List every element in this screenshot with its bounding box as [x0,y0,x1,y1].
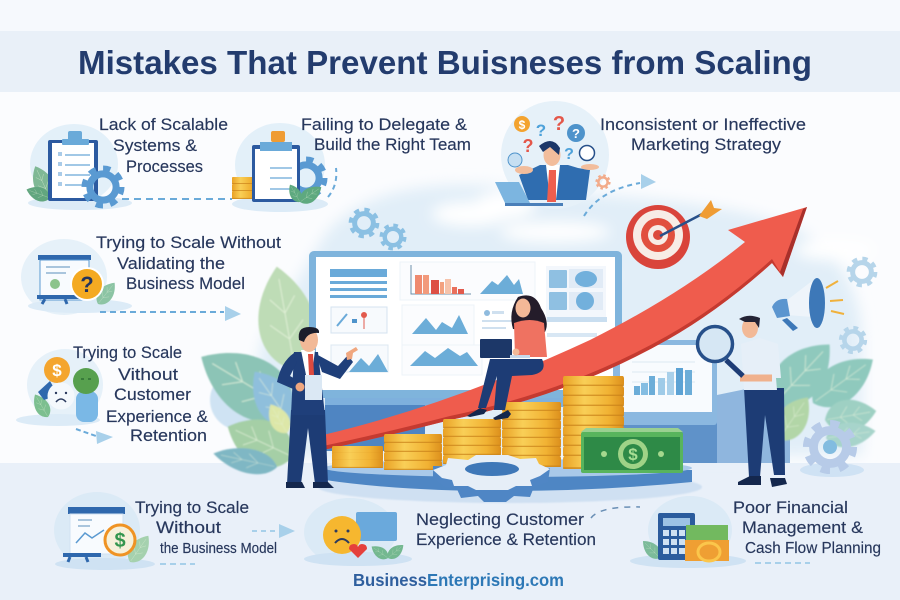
label: Systems & [113,136,198,155]
title banner: Mistakes That Prevent Buisneses from Scaling [78,44,812,81]
icon: customer feedback faces [16,349,103,426]
stack four [502,402,561,467]
area chart bottom [402,345,482,375]
stack two [384,434,442,470]
jacket [291,352,325,415]
background gears [351,210,405,249]
raised hand [346,347,358,360]
item: neglecting customer experience [304,498,596,566]
stack of cash: $ [628,445,638,464]
item: validating the business model [21,233,281,321]
bar chart right monitor [632,362,695,395]
label: Vithout [118,365,178,384]
coin stacks [332,376,624,470]
label: Experience & Retention [416,530,596,549]
shirt [741,338,781,390]
label [600,115,806,154]
item: customer experience and retention left [16,343,209,445]
shoes [467,408,511,420]
icon: board with dollar badge: $ [114,530,126,552]
connector [328,168,336,197]
red growth arrow [323,207,807,450]
laptop [480,339,512,358]
label: Cash Flow Planning [745,540,881,557]
shoes [286,482,334,488]
scatter chart [331,307,387,333]
label [135,498,277,557]
icon: presentation board and question mark [21,239,132,315]
man with magnifier [698,316,787,487]
head [300,328,318,352]
background clouds [240,185,875,458]
icon: confused businessman: ? [536,121,546,140]
item: poor financial management [591,496,881,568]
face [516,298,530,318]
area chart centre [402,305,474,345]
label: Marketing Strategy [631,135,782,154]
shoes [738,476,787,487]
forearm [740,374,772,382]
document [305,375,322,400]
item: trying to scale without the business model [54,492,295,570]
item: marketing strategy [495,101,806,216]
centre gear [433,455,550,502]
icon: confused businessman: $ [519,118,526,132]
icon: confused businessman: ? [572,126,580,141]
centre chart panel [400,262,535,300]
icon panel [546,266,607,337]
label: Management & [742,518,864,537]
label: Inconsistent or Ineffective [600,115,806,134]
dashboard monitor [309,251,622,451]
icon: confused businessman: ? [564,146,574,163]
icon: sad face and heart [304,498,412,566]
label [733,498,881,557]
label: Processes [126,157,203,176]
icon: clipboard and gear [24,124,132,210]
connector bottom [755,562,810,564]
label: Lack of Scalable [99,115,228,134]
icon: board with dollar badge [54,492,155,570]
label: Build the Right Team [314,135,471,154]
man presenting [277,327,358,488]
label: Customer [114,385,191,404]
connector arrow [76,429,113,444]
icon: confused businessman: ? [522,136,534,156]
hair [511,295,547,332]
side gears [841,259,875,352]
label: Trying to Scale [135,498,249,517]
stack of cash [581,428,683,473]
icon: confused businessman: ? [553,113,565,135]
icon: confused businessman [495,101,610,209]
top [514,320,547,357]
stack three [443,419,501,464]
magnifier [698,326,732,362]
connector arrow [100,306,241,321]
head [742,318,758,338]
connector arrow [252,524,295,538]
platform [318,459,702,503]
icon: customer feedback faces: $ [52,361,62,380]
stack five [563,376,624,469]
label: Poor Financial [733,498,848,517]
legs [478,359,544,410]
connector top [591,507,640,518]
label [416,510,596,549]
label [73,343,209,445]
stack one [332,446,383,468]
shirt and tie [301,350,315,375]
icon: calculator, cash and wallet [630,496,746,568]
area chart lower left [331,345,388,372]
legs [744,388,785,477]
website footer: BusinessEnterprising.com [353,570,564,590]
item: failing to delegate [232,115,471,212]
legs [287,410,328,484]
right plant [758,329,884,450]
text lines panel [330,269,387,298]
label: Failing to Delegate & [301,115,468,134]
label [96,233,281,293]
target with arrow [626,200,722,269]
label [301,115,471,154]
label: Neglecting Customer [416,510,584,529]
left plant [186,262,323,479]
right monitor [613,340,790,463]
label: Trying to Scale Without [96,233,281,252]
connector arrow [584,174,656,216]
label: Validating the [117,254,225,273]
item: lack of scalable systems [24,115,232,210]
bar chart [411,265,471,294]
label: Retention [130,426,207,445]
label [99,115,228,176]
title banner [0,31,900,92]
icon: clipboard, coins and gear [232,123,328,212]
megaphone [772,278,844,331]
label: Trying to Scale [73,343,182,362]
label: Experience & [106,407,209,426]
label: Business Model [126,274,245,293]
label: the Business Model [160,540,277,557]
woman on arrow with laptop [467,295,547,420]
data list [482,310,512,329]
connector [122,198,232,200]
area chart top [480,275,523,294]
connector [160,563,195,565]
icon: presentation board and question mark: ? [80,272,94,297]
label: Without [156,518,221,537]
large right gear [800,424,864,477]
